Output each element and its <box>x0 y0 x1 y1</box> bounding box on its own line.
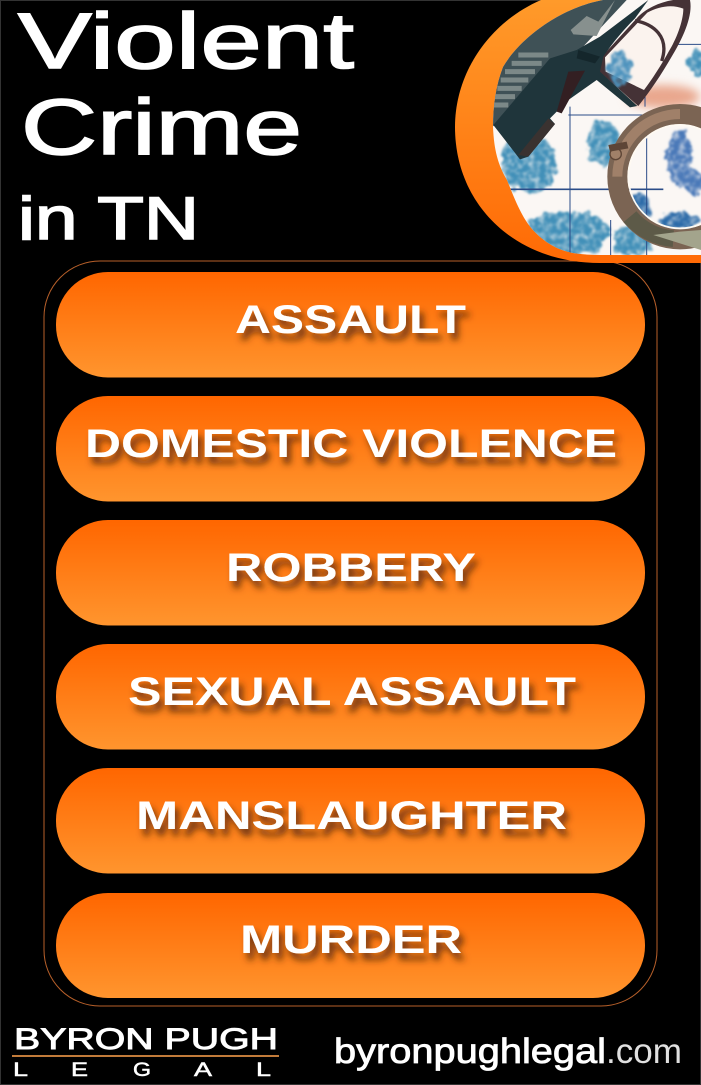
logo letters: G <box>133 1060 151 1081</box>
pill: domestic violence <box>56 396 645 502</box>
gun body <box>493 0 648 159</box>
grid lines <box>500 43 701 260</box>
logo letters <box>13 1060 271 1081</box>
peach glow <box>627 85 700 108</box>
gun slot <box>557 71 585 113</box>
pill: robbery <box>56 520 645 626</box>
url suffix: .com <box>606 1032 682 1071</box>
website url <box>334 1032 682 1071</box>
gun rail <box>518 118 555 157</box>
logo letters: A <box>194 1060 212 1081</box>
gun top lever <box>571 0 615 36</box>
pill: manslaughter <box>56 768 645 874</box>
logo name: BYRON PUGH <box>14 1023 278 1056</box>
pill: murder: MURDER <box>240 918 462 962</box>
handcuff ring <box>608 114 701 250</box>
gun rear slide <box>487 0 627 133</box>
logo letters: L <box>13 1060 28 1081</box>
panel outline: crime list <box>44 261 657 1006</box>
url name: byronpughlegal <box>334 1032 606 1071</box>
logo rule <box>12 1055 279 1057</box>
grip serrations <box>493 55 548 105</box>
logo letters: L <box>256 1060 271 1081</box>
fingerprint smudges <box>500 48 701 257</box>
logo letters: E <box>71 1060 88 1081</box>
pill: sexual assault: SEXUAL ASSAULT <box>128 670 576 714</box>
pill: manslaughter: MANSLAUGHTER <box>136 794 567 838</box>
title <box>18 0 354 252</box>
pill: sexual assault <box>56 644 645 750</box>
photo: gun and handcuffs on fingerprints <box>480 0 701 260</box>
title line: in TN: in TN <box>18 185 199 252</box>
gun trigger <box>635 21 664 61</box>
photo badge <box>455 0 701 263</box>
orange crescent frame <box>455 0 701 263</box>
pill: assault <box>56 272 645 378</box>
title line: Crime: Crime <box>21 82 302 171</box>
pill: domestic violence: DOMESTIC VIOLENCE <box>85 422 617 466</box>
gun trigger guard <box>599 0 691 106</box>
logo: Byron Pugh Legal <box>12 1023 279 1081</box>
pill: robbery: ROBBERY <box>226 546 476 590</box>
list of violent crimes <box>56 272 645 998</box>
pill: assault: ASSAULT <box>235 298 466 342</box>
pill: murder <box>56 893 645 998</box>
